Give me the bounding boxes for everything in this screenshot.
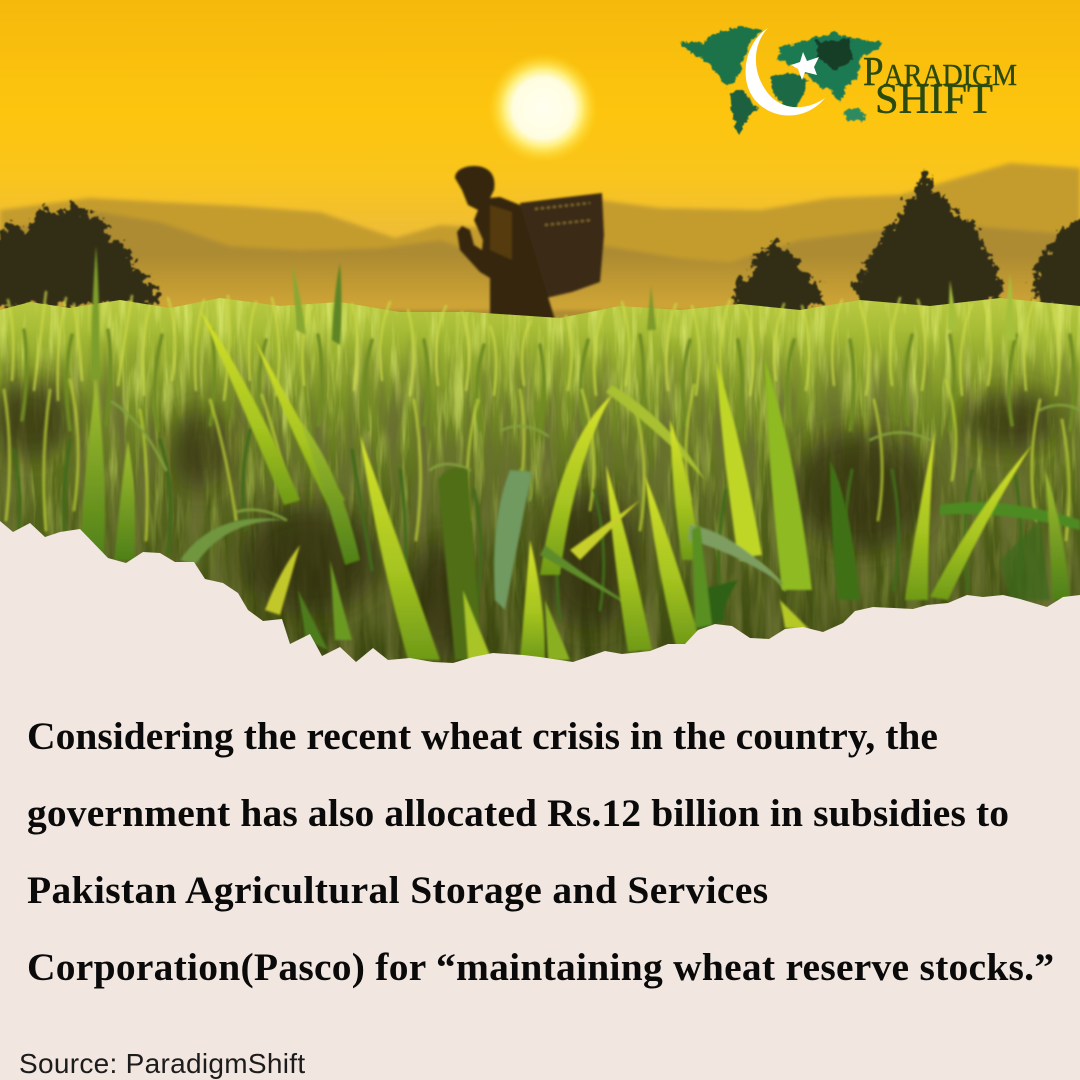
body text <box>27 714 1054 989</box>
photo: farmer in a green field at sunset, with torn paper edge and logo <box>0 0 1080 663</box>
body text: government has also allocated Rs.12 billion in subsidies to <box>27 791 1009 835</box>
logo: Paradigm Shift: SHIFT <box>875 77 993 123</box>
logo crescent <box>746 28 825 116</box>
farmer with basket <box>455 166 604 330</box>
tree far right <box>1032 210 1080 328</box>
body text: Corporation(Pasco) for “maintaining wheat reserve stocks.” <box>27 945 1054 989</box>
wheat blades, foreground <box>298 430 1032 660</box>
sky <box>0 0 1080 320</box>
background trees <box>0 166 1080 328</box>
logo wordmark: PARADIGM <box>863 48 1017 94</box>
figure <box>455 166 557 330</box>
distant mountains <box>0 163 1080 320</box>
torn paper panel <box>0 521 1080 1080</box>
fine grass blades <box>4 292 1080 620</box>
logo: Paradigm Shift <box>680 28 1017 135</box>
basket <box>520 193 604 298</box>
tree large right <box>852 166 1004 318</box>
dark soil patches <box>0 380 1060 660</box>
wheat blades, mid row <box>80 246 1080 660</box>
logo world map <box>680 28 883 135</box>
body text: Pakistan Agricultural Storage and Services <box>27 868 768 912</box>
tree small centre-right <box>732 238 824 318</box>
tree left <box>0 200 160 308</box>
source line: Source: ParadigmShift <box>19 1048 305 1079</box>
sun <box>488 53 598 163</box>
field base <box>0 296 1080 680</box>
logo star <box>791 52 819 80</box>
body text: Considering the recent wheat crisis in the country, the <box>27 714 938 758</box>
